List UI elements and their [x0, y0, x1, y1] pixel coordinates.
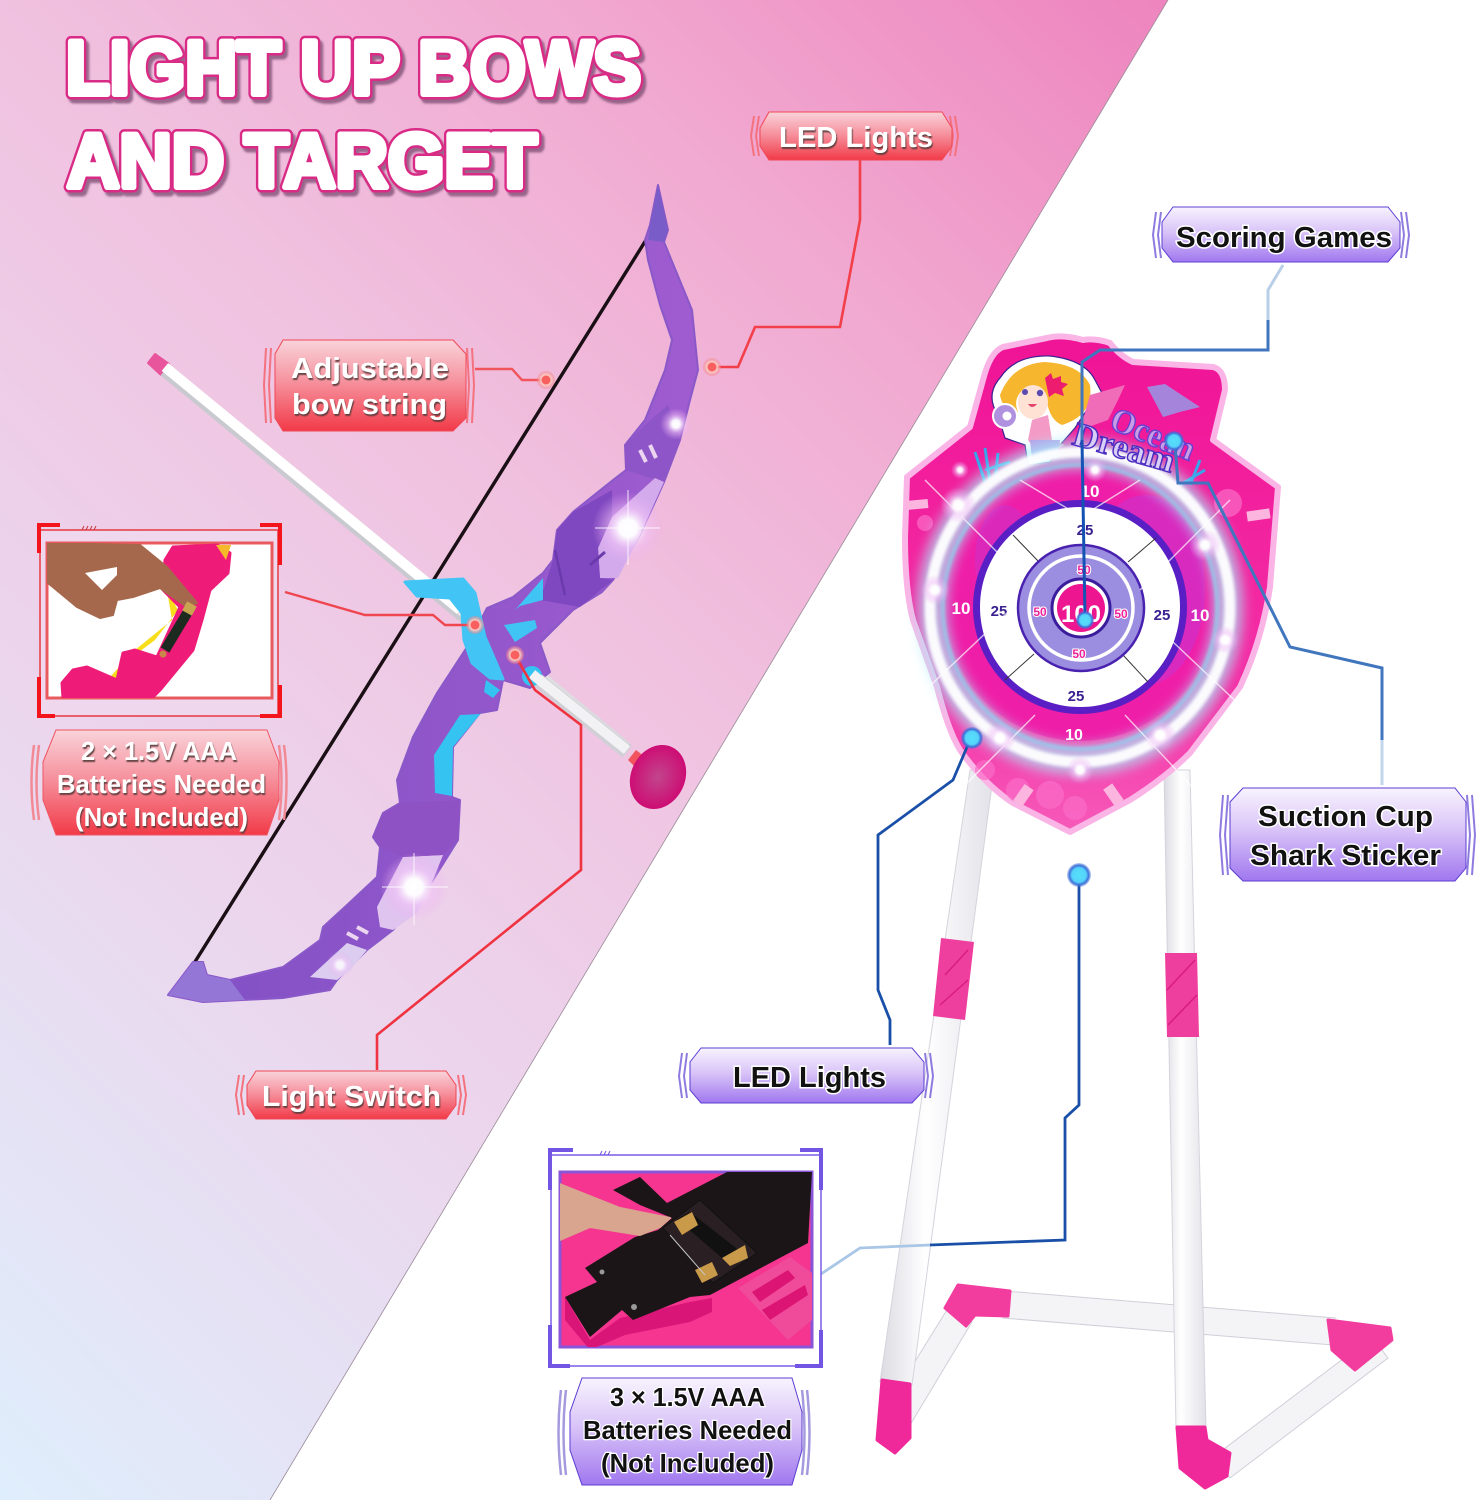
- target score numbers: 25: [1154, 607, 1170, 624]
- label: 3 x 1.5V AAA batteries needed: [558, 1378, 810, 1485]
- connector: bow battery: [285, 592, 484, 634]
- target score numbers: 10: [1081, 482, 1099, 501]
- connector: target battery: [815, 863, 1091, 1278]
- label: 3 x 1.5V AAA batteries needed: (Not Included): [601, 1448, 774, 1478]
- target stand: base frame: [888, 1285, 1392, 1478]
- connector: suction cup: [1164, 431, 1382, 785]
- label: 2 x 1.5V AAA batteries needed: Batteries Needed: [57, 769, 266, 799]
- text: Ocean Dream logo: Ocean: [1105, 401, 1201, 468]
- label: 3 x 1.5V AAA batteries needed: Batteries Needed: [583, 1415, 792, 1445]
- photo panel: bow battery: [39, 525, 280, 716]
- label: 2 x 1.5V AAA batteries needed: [32, 730, 286, 835]
- text: Ocean Dream logo: [1069, 401, 1201, 480]
- label: Suction Cup Shark Sticker: [1220, 788, 1475, 881]
- target score numbers: 50: [1114, 607, 1128, 621]
- target score numbers: 50: [1072, 647, 1086, 661]
- connector: light switch: [377, 646, 581, 1070]
- label: Adjustable bow string: bow string: [292, 389, 447, 421]
- target score numbers: 10: [1065, 727, 1083, 744]
- label: Scoring Games: [1153, 207, 1409, 262]
- target stand: left leg: [877, 770, 994, 1453]
- pink diagonal background panel: [0, 0, 1168, 1500]
- title: [66, 26, 641, 204]
- target score numbers: 25: [1068, 688, 1084, 705]
- title: LIGHT UP BOWS: [66, 26, 641, 111]
- label: 2 x 1.5V AAA batteries needed: 2 × 1.5V AAA: [81, 736, 237, 766]
- target score numbers: 25: [991, 603, 1007, 620]
- label: Suction Cup Shark Sticker: Shark Sticker: [1250, 840, 1441, 872]
- connector: LED Lights on bow: [703, 160, 860, 376]
- decorative coral: [975, 448, 1205, 485]
- target rings: [945, 471, 1215, 741]
- title: AND TARGET: [67, 119, 537, 204]
- label: Light Switch: [236, 1071, 466, 1119]
- label: Adjustable bow string: Adjustable: [291, 353, 449, 385]
- target stand: right leg: [1164, 770, 1230, 1488]
- label: Scoring Games: Scoring Games: [1176, 222, 1392, 254]
- bow light glows: [326, 408, 692, 979]
- label: 2 x 1.5V AAA batteries needed: (Not Included): [75, 802, 248, 832]
- connector: adjustable bow string: [475, 369, 555, 389]
- bow body: [168, 185, 698, 1002]
- bow string: [193, 240, 646, 965]
- label: LED Lights (bow): [751, 112, 958, 160]
- arrow shaft and tip: [148, 354, 627, 750]
- title: LIGHT UP BOWS: [66, 26, 641, 111]
- title: AND TARGET: [67, 119, 537, 204]
- target score numbers: 50: [1077, 563, 1091, 577]
- target score numbers: [952, 482, 1209, 744]
- blue arrow rest: [405, 579, 503, 679]
- target score numbers: 10: [1191, 606, 1209, 625]
- label: Adjustable bow string: [264, 340, 474, 431]
- target LED glow ring: [915, 452, 1245, 790]
- arrow front end with suction pad: [522, 666, 696, 818]
- label: LED Lights (target): LED Lights: [733, 1062, 886, 1094]
- photo panel: target battery: [550, 1150, 821, 1366]
- label: Suction Cup Shark Sticker: Suction Cup: [1258, 801, 1433, 833]
- text: Ocean Dream logo: Dream: [1069, 416, 1179, 480]
- target shield: [905, 336, 1278, 832]
- target score numbers: 50: [1033, 605, 1047, 619]
- label: Light Switch: Light Switch: [262, 1081, 441, 1113]
- label: LED Lights (bow): LED Lights: [779, 122, 933, 154]
- label: 3 x 1.5V AAA batteries needed: 3 × 1.5V AAA: [610, 1382, 765, 1412]
- label: LED Lights (target): [679, 1048, 933, 1103]
- target score numbers: 10: [952, 599, 970, 618]
- mermaid illustration: [992, 356, 1200, 465]
- connector: scoring games: [1076, 265, 1283, 629]
- connector: target LED lights: [878, 727, 983, 1045]
- target score numbers: 25: [1077, 522, 1093, 539]
- target score numbers: 100: [1061, 601, 1101, 628]
